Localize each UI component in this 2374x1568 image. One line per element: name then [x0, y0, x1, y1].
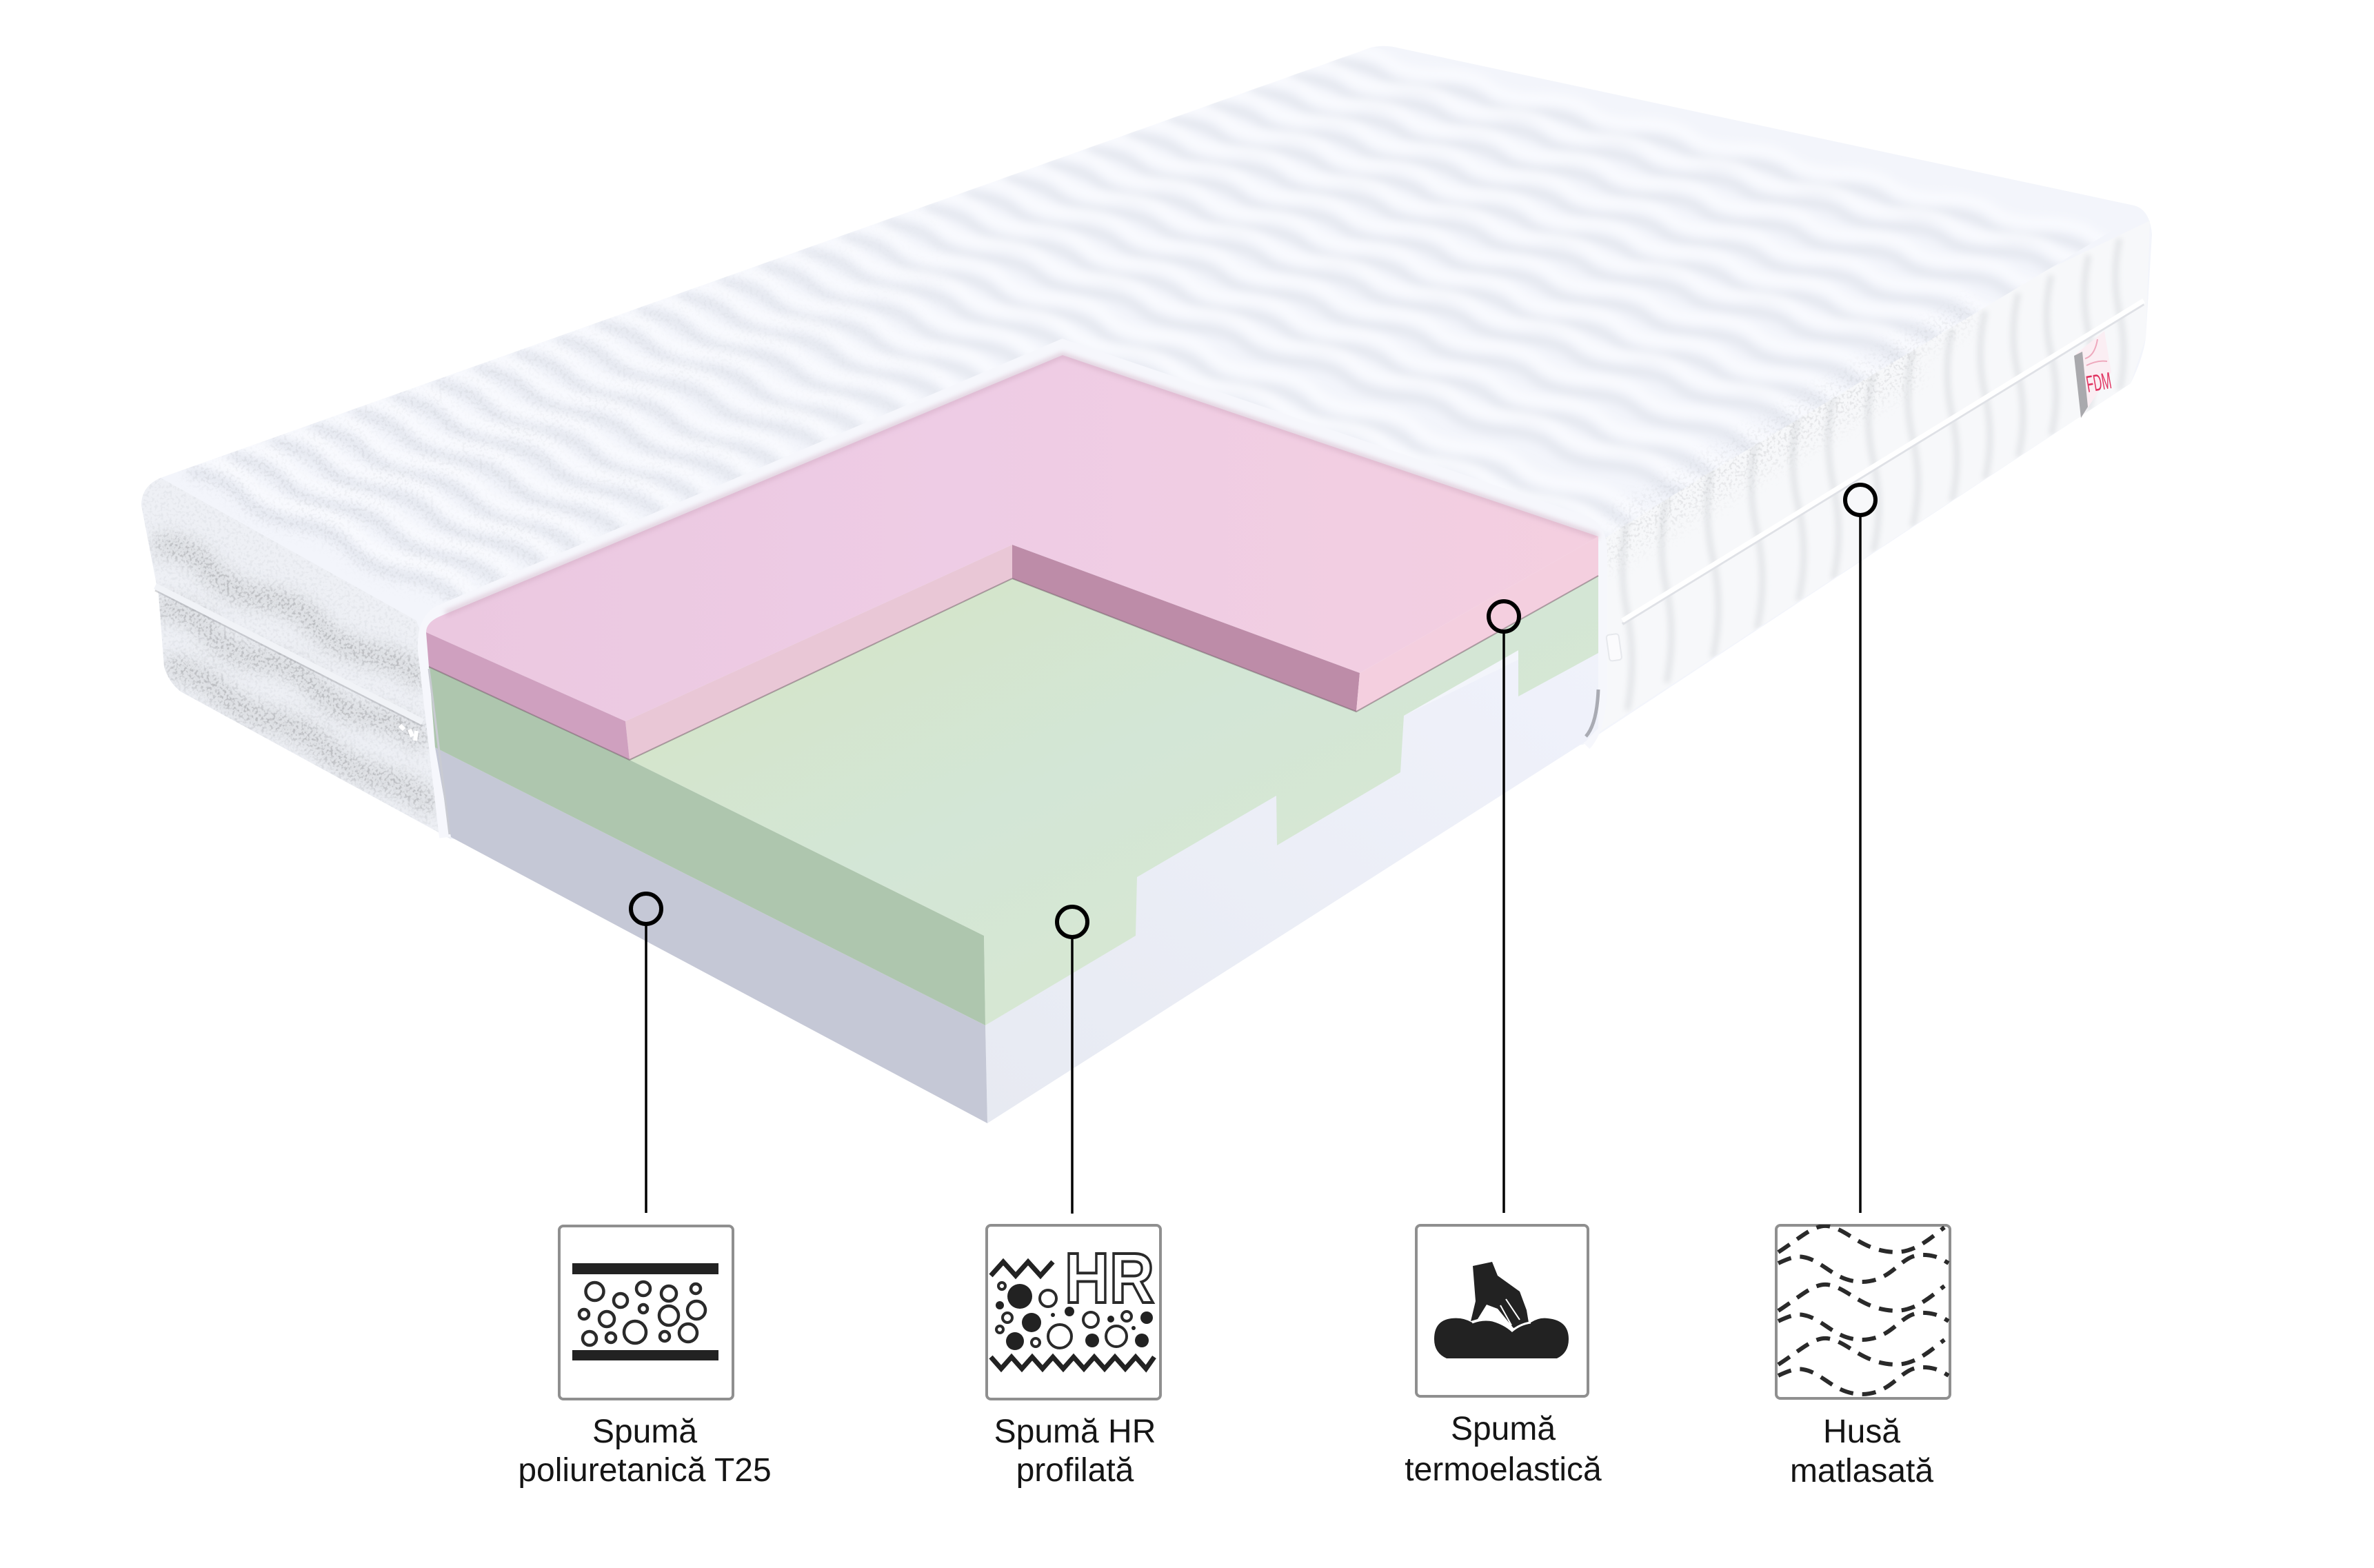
zipper pulls	[400, 634, 1622, 741]
quilted cover body	[141, 46, 2152, 839]
brand tag: FDM	[2084, 368, 2113, 398]
icon: thermoelastic foam with hand	[1416, 1225, 1588, 1396]
label: polyurethane foam: poliuretanică T25	[518, 1452, 772, 1489]
textured left end waves	[141, 478, 451, 839]
icon: HR foam	[987, 1225, 1160, 1399]
foam layer: green HR profiled	[429, 576, 1598, 1025]
quilting waves on top surface	[186, 57, 2086, 600]
cover piping lines	[155, 301, 2144, 726]
mattress illustration	[141, 46, 2152, 1123]
cover right side face	[1583, 221, 2150, 743]
label: polyurethane foam: Spumă	[592, 1414, 697, 1450]
label: HR foam: profilată	[1016, 1452, 1134, 1489]
brand tag	[2074, 331, 2113, 418]
label: thermoelastic foam: termoelastică	[1405, 1451, 1602, 1488]
icon: polyurethane foam	[559, 1226, 733, 1399]
label: quilted cover: Husă	[1823, 1414, 1900, 1450]
icon: HR foam: HR	[1065, 1238, 1154, 1318]
foam layer: pink thermoelastic	[426, 355, 1598, 760]
label: quilted cover: matlasată	[1790, 1453, 1933, 1489]
callout: polyurethane foam	[631, 894, 661, 1213]
foam layer: white polyurethane T25	[435, 621, 1598, 1123]
mesh texture along top ridge	[1613, 312, 1972, 525]
cover left end face	[141, 478, 451, 839]
callout: thermoelastic foam	[1489, 601, 1519, 1213]
cover cut edge band	[427, 348, 1598, 837]
callout: HR foam	[1057, 907, 1087, 1214]
label: thermoelastic foam: Spumă	[1451, 1411, 1556, 1447]
vertical ribs on right side	[1600, 239, 2124, 710]
icon: quilted cover	[1776, 1225, 1950, 1398]
callout: quilted cover	[1845, 485, 1875, 1213]
label: HR foam: Spumă HR	[994, 1414, 1156, 1450]
